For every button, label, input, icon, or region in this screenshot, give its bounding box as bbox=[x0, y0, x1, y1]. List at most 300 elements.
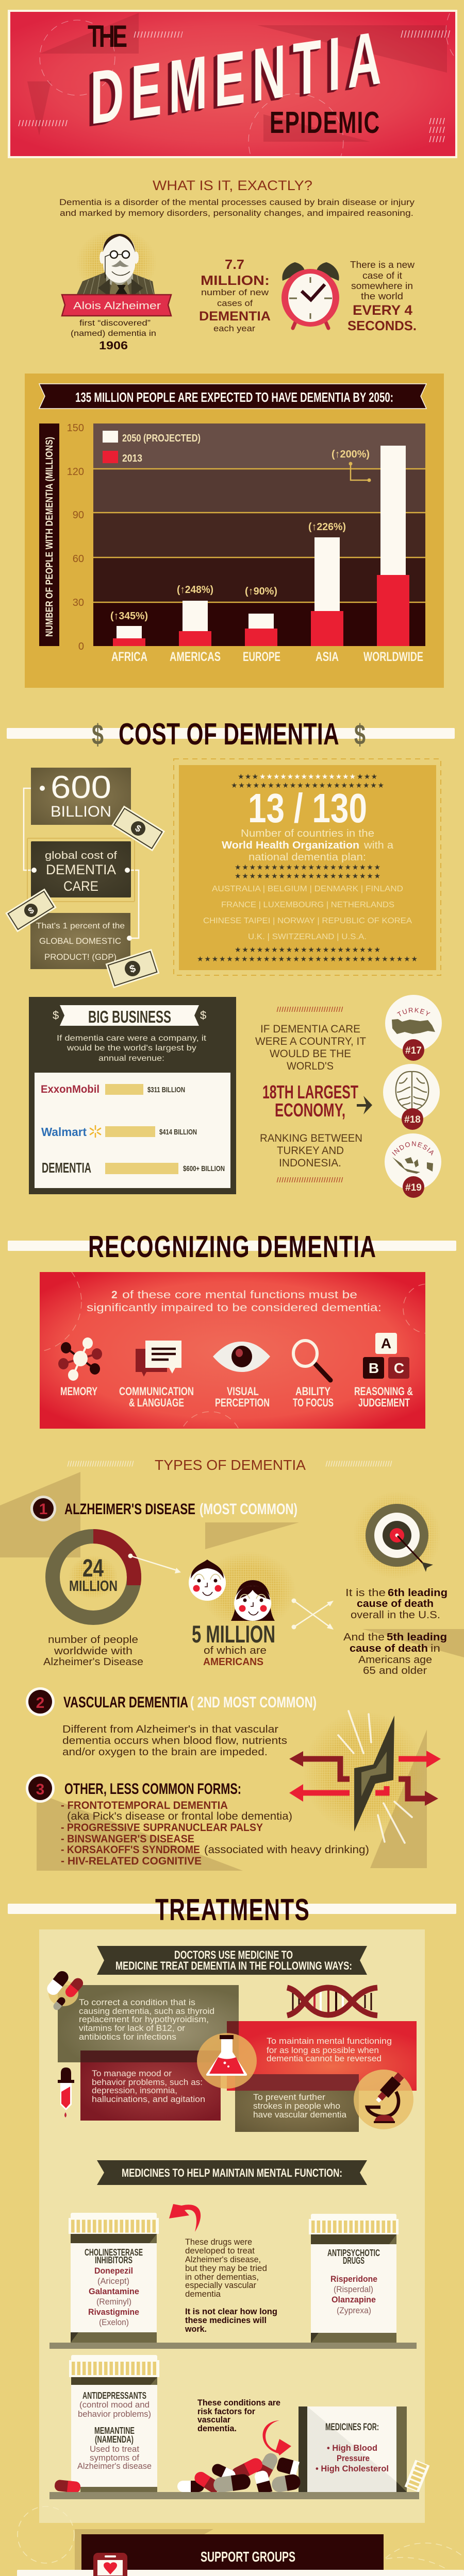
heading: what is it: WHAT IS IT, EXACTLY? bbox=[153, 178, 312, 193]
text: country list: FRANCE | LUXEMBOURG | NETHERLANDS bbox=[221, 901, 394, 909]
list: other forms: (associated with heavy drinking) bbox=[204, 1844, 369, 1856]
title: The: THE bbox=[88, 20, 127, 54]
heading: support groups: SUPPORT GROUPS bbox=[201, 2549, 295, 2565]
card: global cost of dementia care: global cost of bbox=[45, 850, 118, 861]
bottle: antipsychotic drugs: Olanzapine bbox=[332, 2295, 376, 2304]
icon: dna helix bbox=[287, 1987, 377, 2015]
bar: Dementia: DEMENTIA bbox=[42, 1160, 91, 1176]
text: first discovered 1906: 1906 bbox=[99, 339, 128, 352]
text: new case every 4 seconds: the world bbox=[361, 291, 403, 301]
text: drugs were developed: It is not clear how long bbox=[185, 2307, 277, 2316]
text: drugs were developed: These drugs were bbox=[185, 2237, 252, 2247]
bottle: antidepressants bbox=[69, 2355, 159, 2492]
panel: national dementia plans bbox=[174, 759, 441, 975]
rank circle: Indonesia 19: #19 bbox=[405, 1182, 422, 1193]
card: correct a condition: To correct a condition that is bbox=[79, 1997, 195, 2007]
text: big business intro: annual revenue: bbox=[98, 1054, 164, 1063]
text: new case every 4 seconds: SECONDS. bbox=[347, 318, 417, 333]
card: maintain mental functioning: To maintain mental functioning bbox=[267, 2036, 392, 2046]
card: maintain mental functioning: dementia cannot be reversed bbox=[267, 2054, 382, 2063]
icon: alarm clock bbox=[281, 262, 339, 328]
text: leading cause of death: in bbox=[430, 1643, 440, 1654]
header banner bbox=[8, 10, 457, 158]
title: Dementia: DEMENTIA bbox=[90, 15, 382, 140]
heading: recognizing dementia: RECOGNIZING DEMENTIA bbox=[88, 1229, 376, 1264]
card: correct a condition: antibiotics for infections bbox=[79, 2032, 176, 2042]
icon: money bill 1 bbox=[111, 806, 165, 851]
stat: 5 million americans: AMERICANS bbox=[203, 1656, 263, 1668]
stat: 7.7 million new cases: each year bbox=[213, 324, 255, 333]
icon: pills bbox=[45, 1969, 85, 2011]
text: 18th largest economy: INDONESIA. bbox=[279, 1157, 341, 1169]
icon: abc blocks: B bbox=[369, 1360, 379, 1376]
text: 18th largest economy: IF DEMENTIA CARE bbox=[260, 1023, 360, 1035]
bottle: cholinesterase inhibitors bbox=[69, 2213, 159, 2343]
text: 2 of these functions: significantly impaired to be considered dementia: bbox=[87, 1302, 382, 1314]
y axis labels: 90 bbox=[73, 510, 84, 521]
heading: treatments bbox=[8, 1892, 456, 1927]
heading: 3 other forms bbox=[26, 1774, 241, 1803]
list: other forms: - FRONTOTEMPORAL DEMENTIA bbox=[61, 1800, 228, 1811]
text: country list: CHINESE TAIPEI | NORWAY | REPUBLIC OF KOREA bbox=[203, 917, 412, 925]
banner: doctors use medicine: MEDICINE TREAT DEMENTIA IN THE FOLLOWING WAYS: bbox=[115, 1959, 352, 1972]
text: country list: AUSTRALIA | BELGIUM | DENMARK | FINLAND bbox=[212, 885, 403, 893]
text: who countries description bbox=[222, 828, 394, 863]
labels: functions bbox=[60, 1385, 413, 1409]
panel: treatments bbox=[39, 1929, 429, 2523]
bottle: antidepressants: behavior problems) bbox=[78, 2409, 151, 2419]
stat: 7.7 million new cases: number of new bbox=[201, 287, 269, 297]
bottle: antipsychotic drugs: (Zyprexa) bbox=[337, 2306, 371, 2315]
x axis labels: AMERICAS bbox=[170, 650, 221, 664]
text: 2 of these functions bbox=[87, 1289, 382, 1314]
heading: 1 alzheimers disease: 1 bbox=[39, 1501, 47, 1518]
rank circle: Turkey 17 bbox=[385, 995, 442, 1061]
bar: Walmart bbox=[41, 1125, 197, 1139]
arrows: crossing bbox=[292, 1598, 334, 1630]
text: leading cause of death: 65 and older bbox=[363, 1665, 427, 1676]
list: other forms: - BINSWANGER'S DISEASE bbox=[61, 1833, 194, 1845]
text: drugs were developed bbox=[185, 2237, 277, 2334]
text: 18th largest economy: WORLD'S bbox=[287, 1060, 334, 1072]
text: leading cause of death: overall in the U.S. bbox=[351, 1609, 440, 1621]
text: drugs were developed: but they may be tried bbox=[185, 2263, 267, 2273]
stat: 7.7 million new cases: DEMENTIA bbox=[199, 309, 271, 324]
heading: types of dementia: TYPES OF DEMENTIA bbox=[155, 1457, 306, 1473]
text: 18th largest economy: WERE A COUNTRY, IT bbox=[255, 1036, 366, 1047]
list: other forms bbox=[61, 1800, 369, 1867]
text: risk factors: risk factors for bbox=[197, 2406, 255, 2416]
heading: cost of dementia: $ bbox=[354, 718, 366, 751]
rank circle: Turkey 17: TURKEY bbox=[397, 1008, 430, 1016]
bottle: cholinesterase inhibitors: INHIBITORS bbox=[95, 2255, 132, 2265]
card: global cost of dementia care: DEMENTIA bbox=[46, 862, 116, 877]
rank circle: brain 18: #18 bbox=[404, 1114, 421, 1125]
ribbon: Alois Alzheimer bbox=[62, 295, 171, 316]
text: vascular description: and/or oxygen to the brain are impeded. bbox=[62, 1747, 268, 1758]
x axis labels bbox=[111, 650, 423, 664]
card: prevent strokes: have vascular dementia bbox=[253, 2110, 347, 2120]
heading: recognizing dementia bbox=[8, 1229, 456, 1264]
bottle: antidepressants: ANTIDEPRESSANTS bbox=[82, 2391, 146, 2401]
heading: cost of dementia bbox=[7, 717, 455, 751]
banner: doctors use medicine bbox=[97, 1946, 367, 1975]
bar: Walmart: Walmart bbox=[41, 1125, 87, 1139]
icon: abc blocks: C bbox=[394, 1360, 404, 1376]
bars: Worldwide bbox=[332, 446, 409, 646]
bottle: antidepressants: symptoms of bbox=[90, 2453, 139, 2463]
bottle: cholinesterase inhibitors: CHOLINESTERASE bbox=[85, 2247, 143, 2258]
text: leading cause of death: 5th leading bbox=[387, 1632, 447, 1643]
heading: cost of dementia: $ bbox=[92, 718, 104, 751]
y axis labels: 0 bbox=[78, 641, 84, 652]
bottle: cholinesterase inhibitors: (Aricept) bbox=[97, 2276, 129, 2286]
bar: ExxonMobil: ExxonMobil bbox=[41, 1083, 100, 1095]
labels: functions: COMMUNICATION bbox=[119, 1385, 194, 1398]
labels: functions: ABILITY bbox=[295, 1385, 330, 1398]
card: manage mood: behavior problems, such as: bbox=[92, 2077, 203, 2087]
stat: 7.7 million new cases bbox=[199, 257, 271, 333]
stat: 5 million americans bbox=[192, 1620, 275, 1668]
text: vascular description bbox=[62, 1724, 287, 1758]
labels: functions: MEMORY bbox=[60, 1385, 97, 1398]
icon: lightning bolt with arrows bbox=[289, 1711, 441, 1843]
panel: support groups bbox=[17, 2529, 464, 2576]
legend bbox=[103, 431, 201, 464]
rank circle: Turkey 17: #17 bbox=[405, 1045, 422, 1056]
y axis labels: 150 bbox=[67, 422, 84, 434]
card: maintain mental functioning: for as long as possible when bbox=[267, 2045, 379, 2055]
stat: 13 of 130: 13 / 130 bbox=[248, 785, 367, 831]
card: correct a condition: vitamins for lack of B12, or bbox=[79, 2023, 185, 2033]
arrow: donut to americans bbox=[128, 1554, 181, 1573]
bottle: antipsychotic drugs bbox=[309, 2214, 399, 2343]
star rows top: ★★★★★★★★★★★★★★ bbox=[259, 773, 356, 781]
text: 2 of these functions: 2 bbox=[111, 1289, 118, 1301]
rank circle: Indonesia 19: INDONESIA bbox=[392, 1141, 434, 1156]
text: big business intro bbox=[57, 1034, 207, 1063]
bars: Worldwide: (↑200%) bbox=[332, 449, 370, 460]
banner: doctors use medicine: DOCTORS USE MEDICINE TO bbox=[174, 1948, 293, 1961]
panel: core mental functions bbox=[40, 1272, 425, 1429]
y axis title bbox=[39, 423, 59, 646]
heading: 1 alzheimers disease: ALZHEIMER'S DISEASE bbox=[64, 1501, 195, 1518]
icon: money bill 2: $ bbox=[26, 905, 36, 916]
icon: abc blocks: A bbox=[381, 1335, 391, 1351]
text: 18th largest economy: RANKING BETWEEN bbox=[260, 1132, 362, 1144]
stat: 5 million americans: of which are bbox=[204, 1645, 267, 1656]
x axis labels: WORLDWIDE bbox=[363, 650, 423, 664]
ribbon: big business: BIG BUSINESS bbox=[88, 1007, 171, 1026]
star rows bottom bbox=[197, 946, 418, 963]
card: prevent strokes: strokes in people who bbox=[253, 2101, 340, 2111]
shelf: lower bbox=[49, 2492, 419, 2499]
text: drugs were developed: dementia bbox=[185, 2289, 221, 2299]
text: 18th largest economy: 18TH LARGEST bbox=[262, 1081, 358, 1103]
card: global cost of dementia care: CARE bbox=[63, 878, 98, 894]
text: country list: U.K. | SWITZERLAND | U.S.A. bbox=[248, 933, 367, 941]
text: drugs were developed: work. bbox=[185, 2324, 207, 2334]
star rows bottom: ★★★★★★★★★★★★★★★★★★★★ bbox=[235, 946, 380, 954]
text: leading cause of death: And the bbox=[343, 1632, 385, 1643]
card: manage mood: depression, insomnia, bbox=[92, 2086, 177, 2095]
card: manage mood: To manage mood or bbox=[92, 2069, 172, 2078]
star rows top bbox=[231, 773, 384, 790]
heading: 3 other forms: 3 bbox=[36, 1781, 44, 1798]
definition text bbox=[59, 197, 415, 218]
y axis labels: 120 bbox=[67, 466, 84, 478]
text: leading cause of death: Americans age bbox=[358, 1654, 432, 1666]
y axis labels: 30 bbox=[73, 597, 84, 608]
stat: 7.7 million new cases: MILLION: bbox=[201, 273, 270, 288]
text: 18th largest economy: ECONOMY, bbox=[275, 1099, 345, 1121]
ribbon: big business: $ bbox=[53, 1009, 59, 1022]
labels: functions: PERCEPTION bbox=[215, 1396, 270, 1409]
heading: 3 other forms: OTHER, LESS COMMON FORMS: bbox=[64, 1781, 241, 1798]
icon: abc blocks bbox=[363, 1333, 409, 1379]
definition text: and marked by memory disorders, personality changes, and impaired reasoning. bbox=[60, 208, 413, 218]
rank circle: Indonesia 19 bbox=[385, 1133, 441, 1198]
text: first discovered 1906: first “discovered” bbox=[79, 319, 151, 328]
labels: functions: TO FOCUS bbox=[293, 1396, 334, 1409]
text: 18th largest economy: TURKEY AND bbox=[277, 1145, 344, 1157]
y axis labels: 60 bbox=[73, 553, 84, 565]
bars: Americas bbox=[177, 584, 213, 646]
card: 1 percent of GDP bbox=[30, 913, 132, 969]
bar: ExxonMobil: $311 BILLION bbox=[147, 1086, 185, 1094]
icon: microscope bbox=[354, 2070, 413, 2129]
ribbon: big business bbox=[53, 1005, 206, 1026]
text: new case every 4 seconds bbox=[347, 260, 417, 333]
bars: Asia bbox=[308, 521, 346, 646]
list: other forms: - PROGRESSIVE SUPRANUCLEAR PALSY bbox=[61, 1822, 263, 1834]
icon: money bill 1: $ bbox=[133, 823, 143, 834]
text: who countries description: with a bbox=[363, 840, 394, 851]
labels: functions: & LANGUAGE bbox=[129, 1396, 184, 1409]
ribbon: Alois Alzheimer: Alois Alzheimer bbox=[73, 300, 161, 312]
text: people worldwide bbox=[43, 1634, 143, 1668]
heading: 2 vascular dementia: VASCULAR DEMENTIA bbox=[63, 1694, 188, 1711]
bars: Americas: (↑248%) bbox=[177, 584, 213, 596]
labels: functions: VISUAL bbox=[227, 1385, 259, 1398]
star rows top: ★★★ bbox=[238, 773, 258, 781]
card: 1 percent of GDP: That's 1 percent of the bbox=[36, 922, 125, 930]
y axis labels bbox=[67, 422, 84, 652]
bottle: cholinesterase inhibitors: Donepezil bbox=[94, 2266, 133, 2276]
card: 1 percent of GDP: PRODUCT! (GDP) bbox=[44, 952, 117, 962]
text: risk factors bbox=[197, 2398, 280, 2433]
definition text: Dementia is a disorder of the mental processes caused by brain disease or injury bbox=[59, 197, 415, 207]
bottle: cholinesterase inhibitors: Galantamine bbox=[89, 2286, 139, 2296]
text: new case every 4 seconds: EVERY 4 bbox=[353, 302, 412, 318]
card: 600 billion: BILLION bbox=[51, 803, 111, 820]
icon: single capsule bbox=[54, 2479, 81, 2494]
banner: medicines to maintain function bbox=[97, 2160, 367, 2185]
labels: functions: JUDGEMENT bbox=[358, 1396, 410, 1409]
panel: big business bbox=[29, 997, 236, 1194]
star rows bottom: ★★★★★★★★★★★★★★★★★★★★★★★★★★★★★★ bbox=[197, 955, 418, 963]
text: risk factors: These conditions are bbox=[197, 2398, 280, 2408]
text: leading cause of death: cause of death bbox=[357, 1598, 434, 1609]
icon: american faces bbox=[189, 1552, 296, 1629]
x axis labels: ASIA bbox=[316, 650, 339, 664]
card: 1 percent of GDP: GLOBAL DOMESTIC bbox=[39, 936, 121, 946]
ribbon: big business: $ bbox=[200, 1009, 206, 1022]
dashed decorative circles lower bbox=[0, 2506, 464, 2576]
icon: pile of capsules bbox=[177, 2451, 302, 2495]
bars: Europe bbox=[245, 586, 277, 646]
bottle: cholinesterase inhibitors: (Reminyl) bbox=[96, 2297, 131, 2307]
text: who countries description: World Health Organization bbox=[222, 840, 359, 851]
text: big business intro: would be the world's largest by bbox=[67, 1044, 196, 1053]
text: people worldwide: worldwide with bbox=[54, 1646, 132, 1657]
bar: Walmart: $414 BILLION bbox=[159, 1128, 197, 1137]
text: people worldwide: number of people bbox=[48, 1634, 138, 1646]
bottle: medicines for blood pressure and cholesterol: • High Blood bbox=[327, 2443, 377, 2453]
bars: Asia: (↑226%) bbox=[308, 521, 346, 533]
chart: 24 million donut bbox=[53, 1529, 141, 1618]
arrow: to rank 18 bbox=[357, 1096, 372, 1114]
bar: ExxonMobil bbox=[41, 1083, 185, 1095]
text: new case every 4 seconds: somewhere in bbox=[351, 281, 413, 291]
card: maintain mental functioning bbox=[227, 2021, 417, 2091]
bars: Africa: (↑345%) bbox=[110, 611, 148, 622]
icon: eye bbox=[213, 1342, 270, 1372]
text: 18th largest economy bbox=[255, 1009, 366, 1180]
bottle: antipsychotic drugs: DRUGS bbox=[343, 2256, 364, 2266]
heading: 1 alzheimers disease bbox=[30, 1496, 297, 1521]
arrow: curved up to bottle bbox=[169, 2204, 201, 2232]
text: leading cause of death: It is the bbox=[345, 1587, 386, 1599]
bottle: medicines for blood pressure and cholesterol: MEDICINES FOR: bbox=[325, 2422, 379, 2433]
rank circle: brain 18 bbox=[383, 1064, 440, 1130]
labels: functions: REASONING & bbox=[354, 1385, 413, 1398]
text: first discovered 1906: (named) dementia in bbox=[71, 329, 156, 338]
panel: bar chart 2050 projection bbox=[25, 374, 444, 688]
bottle: medicines for blood pressure and cholesterol bbox=[299, 2406, 429, 2493]
icon: money bill 2 bbox=[5, 888, 57, 933]
icon: phone with heart bbox=[93, 2553, 127, 2576]
text: leading cause of death: cause of death bbox=[350, 1643, 428, 1654]
icon: money bill 3: $ bbox=[128, 963, 137, 975]
card: manage mood bbox=[80, 2050, 221, 2121]
card: correct a condition: causing dementia, such as thyroid bbox=[79, 2006, 214, 2016]
text: who countries description: national dementia plan: bbox=[248, 852, 366, 863]
background shapes: types section bbox=[0, 1472, 464, 1871]
text: new case every 4 seconds: case of it bbox=[362, 270, 402, 281]
text: vascular description: Different from Alzheimer's in that vascular bbox=[62, 1724, 278, 1735]
bottle: antipsychotic drugs: Risperidone bbox=[330, 2274, 377, 2284]
stat: 7.7 million new cases: 7.7 bbox=[225, 257, 244, 272]
icon: magnifying glass bbox=[293, 1341, 330, 1380]
bars: Africa bbox=[110, 611, 148, 646]
heading: 1 alzheimers disease: (MOST COMMON) bbox=[200, 1501, 297, 1518]
star rows top: ★★★★★★★★★★★★★★★★★★★★★ bbox=[231, 782, 384, 790]
star rows top: ★★★ bbox=[357, 773, 377, 781]
card: manage mood: hallucinations, and agitation bbox=[92, 2094, 205, 2104]
banner: medicines to maintain function: MEDICINES TO HELP MAINTAIN MENTAL FUNCTION: bbox=[122, 2166, 342, 2179]
card: correct a condition bbox=[58, 1985, 239, 2062]
star rows middle: ★★★★★★★★★★★★★★★★★★★★ bbox=[235, 872, 380, 880]
text: first discovered 1906 bbox=[71, 319, 156, 352]
banner: 135 million by 2050 bbox=[39, 384, 426, 409]
icon: communication bbox=[136, 1341, 181, 1377]
card: 600 billion: 600 bbox=[51, 770, 111, 805]
icon: target with arrow bbox=[353, 1492, 441, 1579]
text: leading cause of death bbox=[343, 1587, 448, 1676]
shelf: upper bbox=[49, 2343, 417, 2349]
legend: 2050 (PROJECTED) bbox=[122, 433, 201, 444]
text: leading cause of death: 6th leading bbox=[388, 1587, 448, 1599]
icon: memory bbox=[58, 1337, 102, 1381]
text: drugs were developed: in other dementias, bbox=[185, 2272, 259, 2282]
card: 600 billion bbox=[31, 768, 131, 825]
text: drugs were developed: these medicines will bbox=[185, 2315, 267, 2325]
icon: money bill 3 bbox=[106, 949, 159, 988]
text: 18th largest economy: WOULD BE THE bbox=[270, 1048, 351, 1060]
text: new case every 4 seconds: There is a new bbox=[350, 260, 415, 270]
card: prevent strokes: To prevent further bbox=[253, 2092, 325, 2102]
bottle: cholinesterase inhibitors: (Exelon) bbox=[99, 2317, 129, 2327]
legend: 2013 bbox=[122, 453, 142, 464]
panel: global cost connector lines bbox=[24, 788, 139, 938]
bottle: medicines for blood pressure and cholesterol: Pressure bbox=[337, 2453, 370, 2463]
star rows middle bbox=[235, 863, 380, 880]
bottle: antidepressants: Used to treat bbox=[90, 2444, 139, 2454]
chart plot area bbox=[93, 423, 425, 646]
bar: Dementia bbox=[42, 1160, 225, 1176]
bottle: antipsychotic drugs: (Risperdal) bbox=[334, 2284, 373, 2294]
y axis title: NUMBER OF PEOPLE WITH DEMENTIA (MILLIONS) bbox=[44, 437, 55, 637]
chart: 24 million donut: 24 bbox=[82, 1555, 104, 1582]
heading: 2 vascular dementia bbox=[26, 1687, 317, 1716]
stat: 5 million americans: 5 MILLION bbox=[192, 1620, 275, 1648]
bar: Dementia: $600+ BILLION bbox=[183, 1164, 225, 1173]
text: country list bbox=[203, 885, 412, 941]
text: 2 of these functions: of these core mental functions must be bbox=[122, 1289, 357, 1301]
text: people worldwide: Alzheimer's Disease bbox=[43, 1656, 143, 1668]
heading: cost of dementia: COST OF DEMENTIA bbox=[119, 717, 339, 751]
text: drugs were developed: Alzheimer's disease, bbox=[185, 2255, 261, 2264]
bottle: antidepressants: (NAMENDA) bbox=[95, 2434, 134, 2445]
icon: Alois Alzheimer portrait bbox=[76, 229, 157, 296]
arrow: curved to bottle bbox=[263, 2420, 291, 2455]
card: correct a condition: replacement for hypothyroidism, bbox=[79, 2014, 209, 2024]
x axis labels: AFRICA bbox=[111, 650, 147, 664]
list: other forms: - HIV-RELATED COGNITIVE bbox=[61, 1855, 202, 1867]
x axis labels: EUROPE bbox=[243, 650, 280, 664]
bottle: antipsychotic drugs: ANTIPSYCHOTIC bbox=[327, 2248, 380, 2258]
text: big business intro: If dementia care were a company, it bbox=[57, 1034, 207, 1043]
text: risk factors: dementia. bbox=[197, 2424, 237, 2433]
bottle: medicines for blood pressure and cholesterol: • High Cholesterol bbox=[316, 2464, 389, 2473]
star rows middle: ★★★★★★★★★★★★★★★★★★★★ bbox=[235, 863, 380, 872]
heading: 2 vascular dementia: 2 bbox=[36, 1694, 44, 1711]
chart: 24 million donut: MILLION bbox=[69, 1578, 118, 1595]
list: other forms: - KORSAKOFF'S SYNDROME bbox=[61, 1844, 200, 1856]
bottle: antidepressants: (control mood and bbox=[79, 2400, 150, 2410]
text: who countries description: Number of countries in the bbox=[241, 828, 374, 839]
text: drugs were developed: especially vascular bbox=[185, 2280, 256, 2290]
bottle: antidepressants: Alzheimer's disease bbox=[77, 2461, 152, 2471]
card: prevent strokes bbox=[235, 2074, 359, 2132]
title: Epidemic: EPIDEMIC bbox=[270, 105, 379, 140]
card: global cost of dementia care bbox=[27, 838, 135, 902]
icon: dropper bbox=[58, 2067, 74, 2117]
heading: treatments: TREATMENTS bbox=[155, 1892, 309, 1927]
list: other forms: (aka Pick's disease or frontal lobe dementia) bbox=[67, 1810, 292, 1822]
stat: 7.7 million new cases: cases of bbox=[217, 298, 253, 308]
